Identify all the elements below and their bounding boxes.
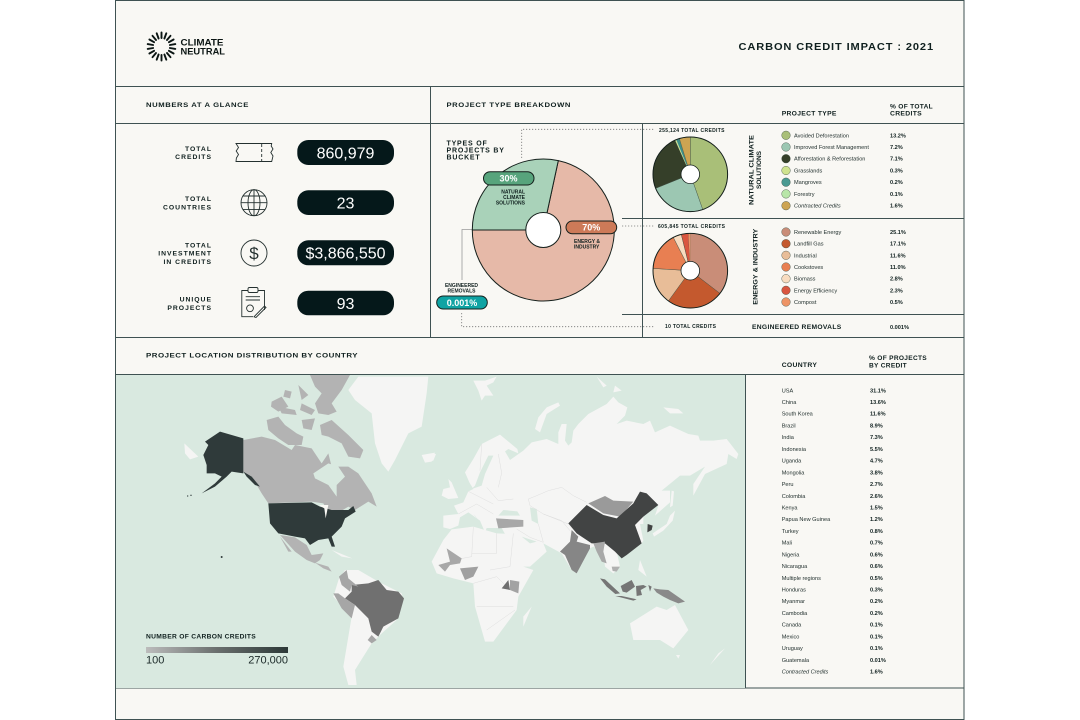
table: countries: 1.5% <box>870 506 883 512</box>
table: countries: 31.1% <box>870 388 886 394</box>
legend: natural climate solutions: Grasslands <box>794 168 822 174</box>
title: CARBON CREDIT IMPACT : 2021 <box>738 42 934 53</box>
panel: numbers at a glance <box>158 140 394 318</box>
chart: natural climate solutions donut <box>653 137 728 212</box>
logo wordmark: CLIMATE <box>180 38 224 48</box>
table: countries: 1.2% <box>870 517 883 523</box>
legend: energy and industry: 2.8% <box>890 277 903 283</box>
page panel <box>116 0 964 720</box>
legend: natural climate solutions: Avoided Deforestation <box>794 133 849 139</box>
legend: energy and industry: Energy Efficiency <box>794 288 837 294</box>
table: countries: 2.7% <box>870 482 883 488</box>
legend: natural climate solutions: 13.2% <box>890 133 906 139</box>
stat: total credits <box>175 140 394 165</box>
table: countries: Myanmar <box>782 599 805 605</box>
callout: energy and industry 70%: ENERGY & <box>574 239 600 245</box>
legend: natural climate solutions: 0.3% <box>890 168 903 174</box>
table: countries: 5.5% <box>870 447 883 453</box>
label: natural climate total: 255,124 TOTAL CREDITS <box>659 128 725 134</box>
stat: unique projects: 93 <box>337 296 354 313</box>
stat: total investment: IN CREDITS <box>163 259 212 266</box>
map: americas <box>184 375 435 685</box>
legend: energy and industry: Cookstoves <box>794 265 823 271</box>
heading: percent of projects column: % OF PROJECTS <box>869 355 927 362</box>
icon: clipboard <box>242 288 266 318</box>
legend: natural climate solutions: Afforestation & Reforestation <box>794 157 865 163</box>
table: countries: 7.3% <box>870 435 883 441</box>
legend: energy and industry <box>782 228 906 306</box>
row: engineered removals: ENGINEERED REMOVALS <box>752 324 842 331</box>
table: countries: Nigeria <box>782 552 800 558</box>
map: eurasia <box>430 377 738 577</box>
legend: energy and industry: Industrial <box>794 253 817 259</box>
table: countries: Papua New Guinea <box>782 517 831 523</box>
table: countries: Indonesia <box>782 447 807 453</box>
table: countries: 11.6% <box>870 412 886 418</box>
icon: ticket <box>236 144 273 162</box>
legend: natural climate solutions: 7.2% <box>890 145 903 151</box>
stat: total countries <box>163 190 394 216</box>
table: countries: Contracted Credits <box>782 670 829 676</box>
legend: natural climate solutions: 0.1% <box>890 192 903 198</box>
legend: energy and industry: 11.0% <box>890 265 906 271</box>
table: countries: Nicaragua <box>782 564 808 570</box>
legend: energy and industry: Biomass <box>794 277 816 283</box>
table: countries: Colombia <box>782 494 806 500</box>
table: countries: Brazil <box>782 424 796 430</box>
table: countries: Uruguay <box>782 646 803 652</box>
stat: total investment: $3,866,550 <box>305 246 386 263</box>
legend: energy and industry: Landfill Gas <box>794 242 824 248</box>
stat: total investment <box>158 240 394 266</box>
legend: natural climate solutions: Improved Forest Management <box>794 145 869 151</box>
legend: natural climate solutions: 1.6% <box>890 204 903 210</box>
icon: dollar coin: $ <box>249 244 259 263</box>
table: countries: Guatemala <box>782 658 810 664</box>
table: countries: 0.1% <box>870 634 883 640</box>
stat: total credits: 860,979 <box>317 145 375 162</box>
legend: energy and industry: 17.1% <box>890 242 906 248</box>
table: countries: 8.9% <box>870 424 883 430</box>
heading: percent of projects column: BY CREDIT <box>869 362 908 370</box>
stat: total countries: COUNTRIES <box>163 204 212 212</box>
table: countries <box>782 388 886 676</box>
row: engineered removals: 0.001% <box>890 325 909 331</box>
table: countries: Mexico <box>782 634 799 640</box>
table: countries: Honduras <box>782 588 806 594</box>
callout: engineered removals 0.001%: REMOVALS <box>448 289 476 295</box>
stat: total credits: TOTAL <box>185 146 212 153</box>
callout: natural climate solutions 30%: 30% <box>499 174 518 184</box>
text: types of projects by bucket: PROJECTS BY <box>446 148 505 154</box>
table: countries: 0.7% <box>870 541 883 547</box>
chart: project bucket donut <box>472 159 614 301</box>
table: countries: 0.6% <box>870 564 883 570</box>
legend: energy and industry: Compost <box>794 300 817 306</box>
table: countries: 1.6% <box>870 670 883 676</box>
legend: number of carbon credits: NUMBER OF CARBON CREDITS <box>146 633 256 640</box>
legend: natural climate solutions: Mangroves <box>794 180 822 186</box>
stat: unique projects <box>167 288 394 318</box>
slice: energy and industry <box>472 161 614 301</box>
callout: engineered removals 0.001%: 0.001% <box>447 298 477 308</box>
legend: energy and industry: 11.6% <box>890 253 906 259</box>
table: countries: Canada <box>782 623 802 629</box>
legend: natural climate solutions <box>782 131 906 210</box>
stat: unique projects: PROJECTS <box>167 305 212 312</box>
table: countries: 0.2% <box>870 611 883 617</box>
logo wordmark: NEUTRAL <box>180 46 225 58</box>
stat: total investment: INVESTMENT <box>158 251 212 258</box>
legend: natural climate solutions: Forestry <box>794 192 815 198</box>
legend: energy and industry: 25.1% <box>890 230 906 236</box>
map: africa and oceania <box>432 527 725 665</box>
table: countries: 2.6% <box>870 494 883 500</box>
stat: total credits: CREDITS <box>175 154 212 161</box>
text: types of projects by bucket: TYPES OF <box>446 140 488 148</box>
callout: natural climate solutions 30%: SOLUTIONS <box>496 200 526 206</box>
table: countries: 13.6% <box>870 400 886 406</box>
stat: total investment: TOTAL <box>185 242 212 250</box>
stat: unique projects: UNIQUE <box>180 296 212 304</box>
table: countries: 0.3% <box>870 588 883 594</box>
table: countries: 3.8% <box>870 470 883 476</box>
table: countries: Peru <box>782 482 794 488</box>
icon: dollar coin <box>241 240 267 266</box>
panel grid lines <box>115 86 964 688</box>
table: countries: 0.01% <box>870 658 886 664</box>
stat: total countries: 23 <box>337 196 354 212</box>
table: countries: 0.1% <box>870 646 883 652</box>
heading: map section: PROJECT LOCATION DISTRIBUTION BY COUNTRY <box>146 352 358 360</box>
heading: project type column: PROJECT TYPE <box>782 110 837 118</box>
row: engineered removals <box>665 324 909 331</box>
stat: total countries: TOTAL <box>185 196 212 203</box>
heading: percent of total credits column: % OF TOTAL <box>890 104 933 110</box>
label: energy and industry vertical: ENERGY & INDUSTRY <box>752 228 760 305</box>
callout: natural climate solutions 30%: NATURAL <box>501 189 525 195</box>
label: natural climate solutions vertical: NATURAL CLIMATE <box>748 134 756 205</box>
callout: natural climate solutions 30%: CLIMATE <box>503 195 526 201</box>
table: countries: China <box>782 400 797 406</box>
table: countries: Uganda <box>782 459 802 465</box>
callout: energy and industry 70%: 70% <box>582 222 600 232</box>
legend: natural climate solutions: Contracted Credits <box>794 204 841 210</box>
legend: number of carbon credits: 100 <box>146 654 164 666</box>
heading: numbers at a glance: NUMBERS AT A GLANCE <box>146 102 249 109</box>
logo sunburst icon <box>148 32 175 60</box>
logo <box>148 32 225 60</box>
table: countries: South Korea <box>782 412 814 418</box>
table: countries: 0.5% <box>870 576 883 582</box>
chart: energy and industry donut <box>653 233 728 308</box>
connector lines <box>462 129 654 327</box>
legend: natural climate solutions: 7.1% <box>890 157 903 163</box>
table: countries: Mongolia <box>782 470 805 476</box>
table: countries: 0.2% <box>870 599 883 605</box>
legend: natural climate solutions: 0.2% <box>890 180 903 186</box>
callout: energy and industry 70% <box>566 221 617 251</box>
table: countries: Turkey <box>782 529 799 535</box>
table: countries: 0.1% <box>870 623 883 629</box>
callout: engineered removals 0.001%: ENGINEERED <box>445 283 478 289</box>
legend: energy and industry: 2.3% <box>890 288 903 294</box>
label: energy and industry total: 605,845 TOTAL CREDITS <box>658 224 726 230</box>
map: project location distribution <box>115 374 745 688</box>
slice: natural climate solutions <box>472 159 558 230</box>
table: countries: Multiple regions <box>782 576 821 582</box>
callout: energy and industry 70%: INDUSTRY <box>574 245 600 251</box>
table: countries: 0.6% <box>870 552 883 558</box>
table: countries: India <box>782 435 795 441</box>
table: countries: 0.8% <box>870 529 883 535</box>
heading: project type breakdown: PROJECT TYPE BREAKDOWN <box>446 102 571 109</box>
legend: number of carbon credits: 270,000 <box>248 654 288 666</box>
legend: energy and industry: 0.5% <box>890 300 903 306</box>
table: countries: USA <box>782 388 793 394</box>
row: engineered removals: 10 TOTAL CREDITS <box>665 324 717 330</box>
table: countries: 4.7% <box>870 459 883 465</box>
legend: energy and industry: Renewable Energy <box>794 230 841 236</box>
icon: globe <box>241 190 267 216</box>
table: countries: Cambodia <box>782 611 808 617</box>
text: types of projects by bucket: BUCKET <box>446 154 480 162</box>
callout: engineered removals 0.001% <box>437 283 487 309</box>
callout: natural climate solutions 30% <box>484 172 534 206</box>
heading: country column: COUNTRY <box>782 362 817 369</box>
table: countries: Mali <box>782 541 792 547</box>
legend: number of carbon credits <box>146 633 288 666</box>
heading: percent of total credits column: CREDITS <box>890 110 922 118</box>
label: natural climate solutions vertical: SOLUTIONS <box>756 151 763 189</box>
table: countries: Kenya <box>782 506 798 512</box>
